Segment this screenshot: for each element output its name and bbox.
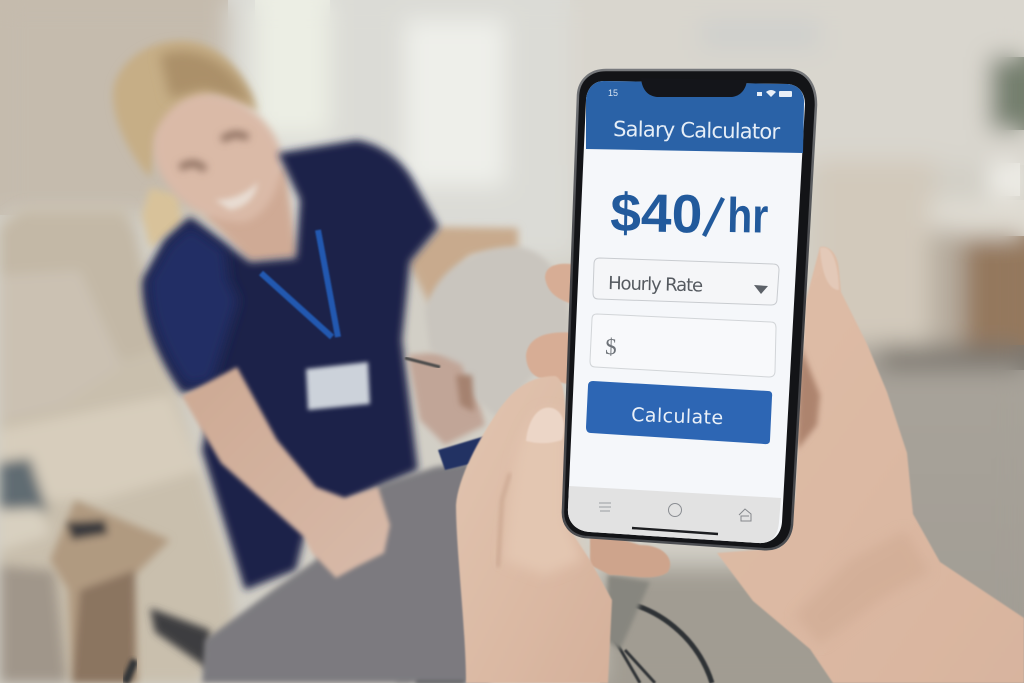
nurse collar and sleeve highlight — [148, 225, 238, 386]
thumb — [504, 410, 582, 575]
finger shadow — [797, 345, 820, 450]
forearm and palm — [717, 247, 1024, 683]
thumb crease — [498, 473, 510, 567]
home indicator — [632, 528, 718, 534]
status icons — [757, 90, 792, 97]
dollar sign: $ — [605, 334, 617, 359]
nav home icon — [668, 504, 682, 516]
dropdown arrow — [754, 285, 768, 294]
app title: Salary Calculator — [613, 117, 781, 144]
nurse neck — [205, 165, 298, 262]
patient collar — [438, 436, 485, 470]
nurse hair — [113, 41, 258, 178]
nav back icon — [739, 509, 751, 521]
patient sweater — [202, 462, 490, 683]
glasses — [405, 358, 440, 367]
screen white — [568, 81, 805, 543]
dollar input field — [590, 314, 776, 377]
badge — [306, 362, 370, 410]
index fingernail — [820, 247, 839, 290]
nurse eyes — [180, 134, 248, 170]
patient neck and face — [408, 350, 485, 445]
right hand holding phone — [717, 247, 1024, 683]
palm and index — [456, 376, 612, 683]
patient ear — [456, 375, 474, 412]
app header bar — [586, 81, 804, 153]
nurse forearm and hand — [182, 367, 390, 578]
hourly rate dropdown — [593, 258, 779, 305]
notch — [641, 78, 747, 97]
thumbnail — [526, 408, 564, 443]
status time: 15 — [608, 88, 618, 98]
lanyard — [261, 230, 338, 337]
side table — [50, 500, 170, 683]
middle finger behind phone — [526, 332, 575, 385]
patient hair — [425, 247, 570, 420]
rate per hour: hr — [727, 189, 769, 244]
bottom navigation bar — [568, 486, 781, 543]
phone frame — [563, 70, 816, 549]
rate amount: $40 — [610, 183, 703, 245]
nurse face — [154, 94, 282, 222]
nurse smile — [215, 182, 258, 210]
nurse arm behind patient — [408, 227, 518, 305]
rate slash — [704, 198, 723, 236]
calculate button — [586, 381, 772, 444]
dropdown label: Hourly Rate — [608, 273, 703, 296]
sofa — [0, 207, 235, 683]
patient — [202, 247, 570, 683]
wheelchair — [125, 575, 712, 683]
fingers below phone — [590, 530, 670, 577]
left hand holding phone — [456, 264, 670, 683]
nurse tunic — [143, 140, 439, 590]
nurse — [113, 41, 518, 590]
button label: Calculate — [631, 404, 724, 429]
wrist shading — [795, 530, 930, 645]
nurse ponytail — [142, 188, 182, 248]
upper finger behind phone — [545, 264, 580, 305]
nav menu icon — [599, 503, 611, 511]
phone — [563, 70, 816, 549]
